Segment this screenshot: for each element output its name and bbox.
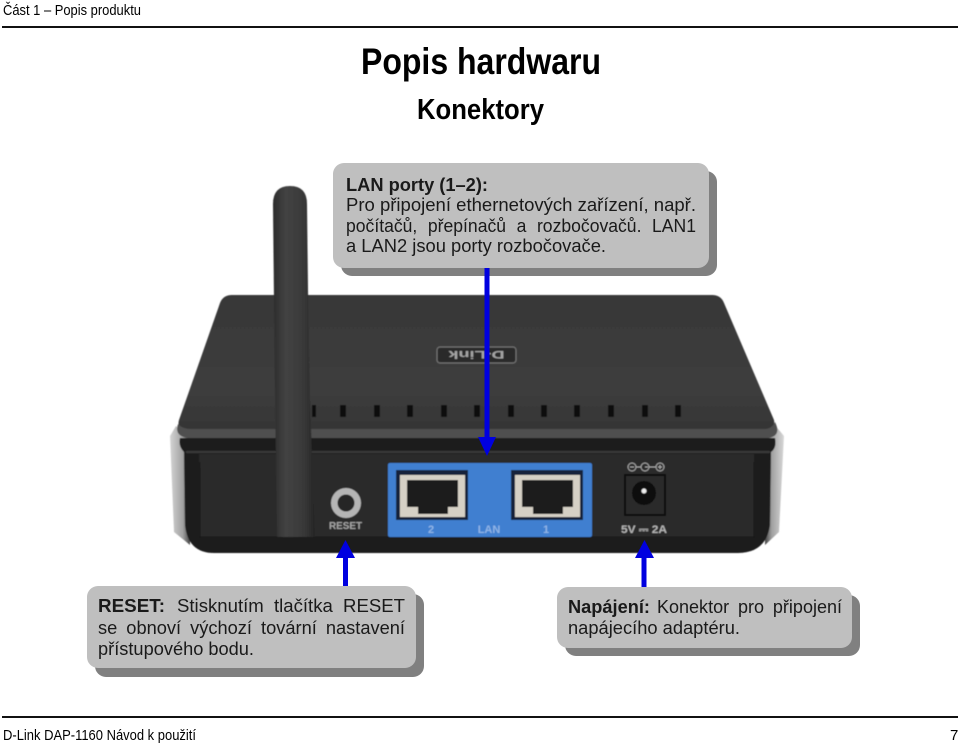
reset button	[329, 488, 362, 532]
LAN panel: 1	[543, 524, 549, 536]
callout: reset: přístupového bodu.	[98, 638, 254, 659]
callout: power	[557, 587, 860, 656]
callout: LAN ports	[333, 163, 717, 276]
router photo	[170, 186, 784, 553]
footer text: D-Link DAP-1160 Návod k použití	[3, 727, 197, 744]
vents	[312, 405, 681, 417]
page footer	[2, 716, 958, 744]
logo plate	[437, 347, 516, 363]
header text: Část 1 – Popis produktu	[3, 2, 141, 19]
LAN panel: LAN	[478, 524, 500, 536]
port labels: 2	[428, 524, 434, 536]
subtitle: Konektory	[417, 94, 544, 126]
callout: power: napájecího adaptéru.	[568, 617, 740, 638]
power connector: 5V ⎓ 2A	[621, 524, 667, 536]
LAN panel	[388, 463, 592, 537]
arrow: power	[635, 540, 654, 587]
power connector	[621, 463, 667, 536]
title: Popis hardwaru	[361, 41, 601, 82]
callout: LAN ports: počítačů, přepínačů a rozbočovačů. LAN1	[346, 215, 696, 236]
arrow: reset	[336, 540, 355, 586]
callout: LAN ports: a LAN2 jsou porty rozbočovače.	[346, 235, 606, 256]
port 2	[396, 470, 468, 520]
callout: LAN ports: Pro připojení ethernetových zařízení, např.	[346, 194, 696, 215]
port 1	[511, 470, 583, 520]
arrow: LAN	[478, 268, 496, 456]
callout: power: Napájení:	[568, 596, 650, 617]
silver sides	[170, 426, 190, 545]
router front body	[180, 438, 776, 553]
antenna	[273, 186, 315, 537]
callout: power: Konektor pro připojení	[657, 596, 843, 617]
callout: reset: Stisknutím tlačítka RESET	[177, 595, 405, 616]
callout: reset: se obnoví výchozí tovární nastavení	[98, 617, 406, 638]
router top surface	[178, 295, 774, 430]
callout: reset: RESET:	[98, 595, 165, 616]
callout: reset	[87, 586, 424, 677]
reset button: RESET	[329, 521, 362, 532]
page number: 7	[950, 727, 958, 744]
callout: LAN ports: LAN porty (1–2):	[346, 174, 488, 195]
router top lip	[177, 422, 777, 438]
logo plate: D-Link	[447, 348, 504, 360]
